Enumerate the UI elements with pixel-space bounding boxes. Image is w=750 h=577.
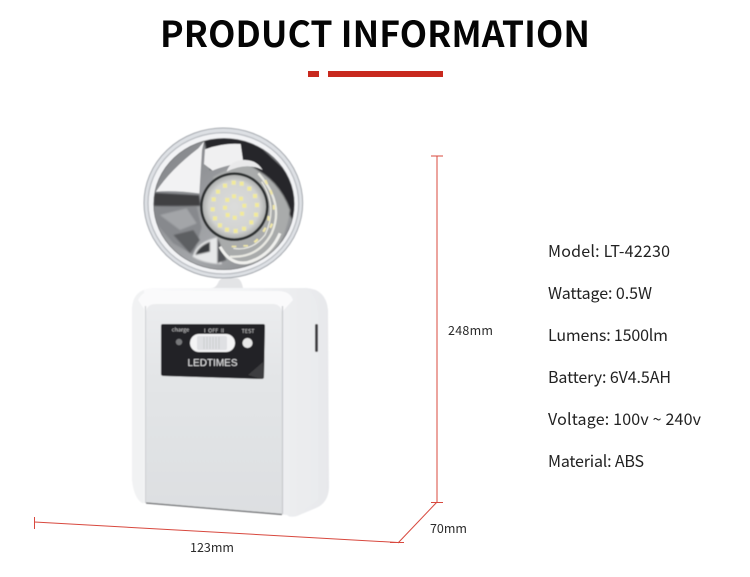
- spec: voltage: Voltage: 100v ~ 240v: [548, 406, 702, 430]
- side socket: [315, 324, 318, 352]
- test button: [242, 338, 252, 348]
- panel labels: I OFF II: [204, 326, 224, 334]
- panel labels: [172, 326, 255, 369]
- panel labels: LEDTIMES: [187, 358, 238, 369]
- LED chips: [211, 181, 259, 233]
- product: emergency light: [132, 128, 329, 517]
- specification list: [548, 238, 702, 472]
- lamp head: [144, 128, 303, 278]
- panel labels: charge: [172, 326, 189, 334]
- control panel: [161, 324, 265, 379]
- height label: 248mm: [448, 320, 493, 339]
- lamp stem: [211, 278, 243, 288]
- spec: lumens: Lumens: 1500lm: [548, 322, 668, 346]
- housing: [132, 288, 329, 517]
- panel labels: TEST: [242, 327, 255, 335]
- charge indicator: [176, 339, 182, 345]
- spec: wattage: Wattage: 0.5W: [548, 280, 652, 304]
- depth label: 70mm: [430, 518, 467, 537]
- title: PRODUCT INFORMATION: [160, 7, 590, 58]
- width label: 123mm: [190, 537, 234, 556]
- reflector shading: [154, 138, 294, 270]
- spec: battery: Battery: 6V4.5AH: [548, 364, 671, 388]
- dimension: width: [34, 517, 404, 542]
- slide switch: [190, 334, 235, 352]
- title underline accent: [308, 71, 443, 77]
- spec: model: Model: LT-42230: [548, 238, 670, 262]
- spec: material: Material: ABS: [548, 448, 644, 472]
- dimension: height: [431, 156, 443, 502]
- dimension: depth: [398, 502, 437, 543]
- LED module: [200, 172, 269, 241]
